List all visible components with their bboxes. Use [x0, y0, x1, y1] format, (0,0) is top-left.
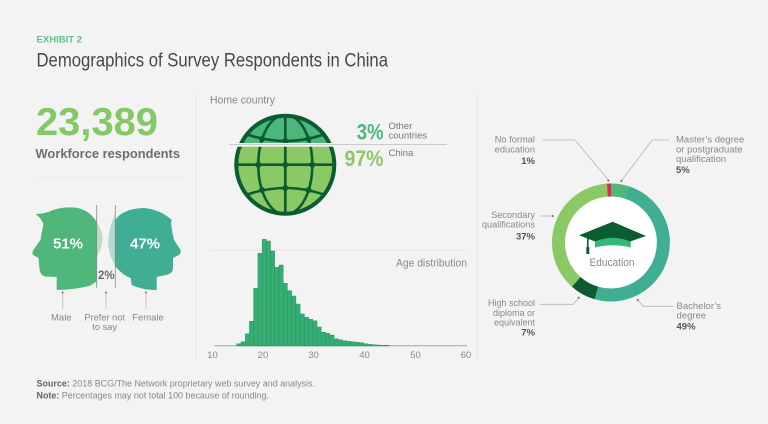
age axis labels [207, 350, 471, 361]
age axis labels: 60 [461, 350, 471, 361]
panel: age distribution [207, 239, 471, 361]
female share: 47% [130, 236, 160, 253]
callout: master's degree: 5% [676, 165, 690, 176]
icon: female head [108, 208, 181, 290]
arrow: prefer not to say [105, 292, 107, 309]
histogram bars [214, 239, 467, 346]
arrow: male [62, 292, 64, 309]
age axis labels: 50 [410, 350, 421, 361]
callout: no formal education: No formal [495, 135, 535, 145]
panel: education [482, 135, 744, 338]
other countries label: Other [388, 121, 412, 132]
label: female: Female [132, 313, 164, 324]
callout: no formal education: education [495, 144, 535, 154]
label: male: Male [51, 313, 72, 324]
source and note: Source: 2018 BCG/The Network proprietary web survey and analysis. [36, 379, 315, 390]
prefer not to say share: 2% [98, 270, 115, 282]
donut chart [559, 190, 663, 295]
icon: male head [32, 207, 103, 290]
label: prefer not to say: to say [92, 322, 117, 332]
china label: China [388, 148, 414, 159]
icon: graduation cap [579, 222, 646, 254]
callout: secondary qualifications: qualifications [482, 220, 535, 230]
callout: secondary qualifications [482, 210, 554, 242]
age axis labels: 40 [359, 350, 370, 361]
callout: high school diploma: 7% [521, 327, 536, 338]
callout: master's degree: qualification [676, 154, 726, 165]
callout: bachelor's degree: degree [676, 310, 706, 321]
callout: high school diploma [488, 297, 580, 338]
callout: master's degree: Master’s degree [676, 135, 744, 146]
other countries share: 3% [357, 119, 384, 144]
other countries label: countries [388, 131, 427, 142]
education center label: Education [590, 257, 634, 269]
callout: secondary qualifications: 37% [516, 231, 536, 242]
panel: workforce respondents [36, 101, 180, 161]
callout: high school diploma: equivalent [494, 318, 535, 328]
china share: 97% [344, 146, 384, 171]
exhibit label: EXHIBIT 2 [36, 35, 82, 46]
callout: secondary qualifications: Secondary [491, 210, 535, 220]
callout: no formal education [495, 135, 609, 182]
callout: high school diploma: High school [488, 298, 535, 308]
callout: bachelor's degree: Bachelor’s [676, 301, 721, 312]
home country heading: Home country [210, 94, 275, 106]
age axis labels: 10 [207, 350, 218, 361]
callout: master's degree: or postgraduate [676, 144, 743, 155]
icon: globe [234, 114, 336, 216]
panel: home country [210, 94, 447, 216]
age axis labels: 30 [308, 350, 319, 361]
callout: no formal education: 1% [521, 156, 536, 167]
age distribution heading: Age distribution [396, 258, 467, 270]
callout: bachelor's degree: 49% [676, 322, 696, 333]
label: prefer not to say: Prefer not [84, 313, 126, 323]
arrow: female [145, 292, 147, 309]
callout: bachelor's degree [637, 299, 721, 333]
source and note: Note: Percentages may not total 100 because of rounding. [36, 391, 269, 402]
respondents label: Workforce respondents [36, 146, 180, 161]
age axis labels: 20 [258, 350, 268, 361]
source and note [36, 379, 315, 402]
respondent count: 23,389 [36, 101, 158, 144]
male share: 51% [53, 236, 83, 253]
callout: high school diploma: diploma or [493, 308, 535, 318]
panel: gender split [32, 205, 181, 332]
title: Demographics of Survey Respondents in China [36, 51, 388, 72]
callout: master's degree [620, 135, 744, 182]
